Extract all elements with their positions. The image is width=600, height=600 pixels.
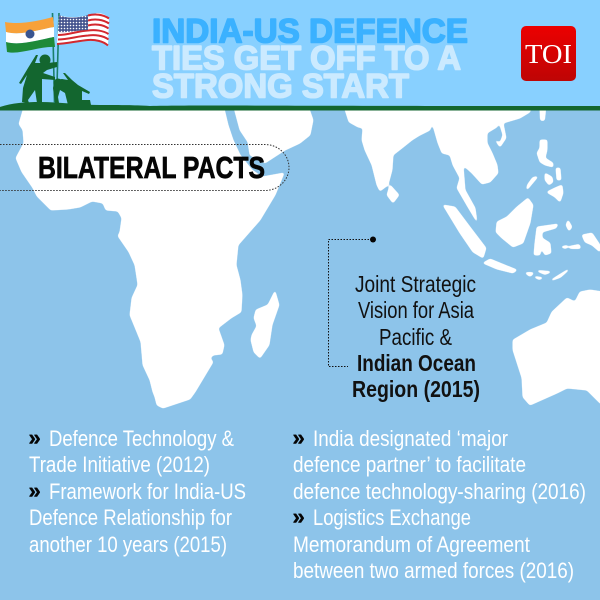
icon: flag poles — [52, 13, 59, 103]
bullet list: right column: India designated ‘major — [313, 426, 508, 451]
TOI logo — [521, 26, 576, 81]
map: Madagascar — [251, 291, 279, 358]
map: Africa — [16, 100, 284, 408]
bullet list: left column: another 10 years (2015) — [29, 532, 227, 557]
icon: US flag — [57, 13, 109, 46]
map: Sulawesi — [534, 224, 558, 255]
map: Borneo — [496, 198, 533, 247]
map: Java — [483, 259, 517, 273]
bullet list: right column — [292, 425, 586, 583]
map: Samar — [556, 168, 561, 180]
bullet list: left column: Trade Initiative (2012) — [29, 452, 210, 477]
map: Visayas — [545, 173, 553, 185]
map: Sumatra — [443, 205, 486, 258]
bullet list: right column: » — [292, 425, 305, 450]
header band — [0, 0, 600, 106]
bullet list: left column: » — [28, 425, 41, 450]
callout text: Vision for Asia — [358, 297, 474, 323]
icon: soldiers silhouette — [19, 54, 91, 105]
callout text — [352, 271, 480, 402]
bullet list: right column: » — [292, 504, 305, 529]
map: Halmahera — [566, 220, 572, 231]
bullet list: right column: Memorandum of Agreement — [293, 532, 531, 557]
callout text: Pacific & — [379, 324, 452, 350]
map: Sri Lanka — [387, 185, 399, 203]
world map — [16, 100, 600, 410]
bullet list: right column: Logistics Exchange — [313, 505, 471, 530]
bullet list: left column: Defence Technology & — [49, 426, 234, 451]
map: Luzon — [537, 140, 553, 167]
map: small islands — [526, 100, 580, 280]
map: Australia — [513, 290, 600, 410]
ground strip with hills — [0, 102, 600, 111]
bilateral pacts label — [0, 144, 289, 190]
heading line 1: INDIA-US DEFENCE — [152, 12, 468, 50]
bullet list: right column: defence partner’ to facilitate — [293, 452, 526, 477]
heading line 3: STRONG START — [152, 68, 409, 106]
callout text: Joint Strategic — [355, 271, 476, 297]
TOI logo: TOI — [525, 39, 572, 69]
heading line 2: TIES GET OFF TO A — [152, 40, 461, 78]
map: Mindanao — [547, 185, 563, 202]
bullet list: left column: Defence Relationship for — [29, 505, 232, 530]
bullet list: left column: » — [28, 478, 41, 503]
map: New Guinea — [582, 233, 600, 252]
map: South and South-East Asia — [342, 100, 532, 222]
label text: BILATERAL PACTS — [38, 150, 265, 185]
icon: India flag — [5, 17, 55, 53]
callout text: Indian Ocean — [357, 350, 476, 376]
bullet list: left column: Framework for India-US — [49, 479, 246, 504]
heading — [152, 12, 468, 106]
callout text: Region (2015) — [352, 376, 480, 402]
map: Palawan — [527, 177, 537, 189]
callout leader line — [328, 236, 376, 366]
label outline — [0, 144, 289, 190]
bullet list: left column — [28, 425, 246, 557]
map: Arabia — [232, 100, 313, 163]
